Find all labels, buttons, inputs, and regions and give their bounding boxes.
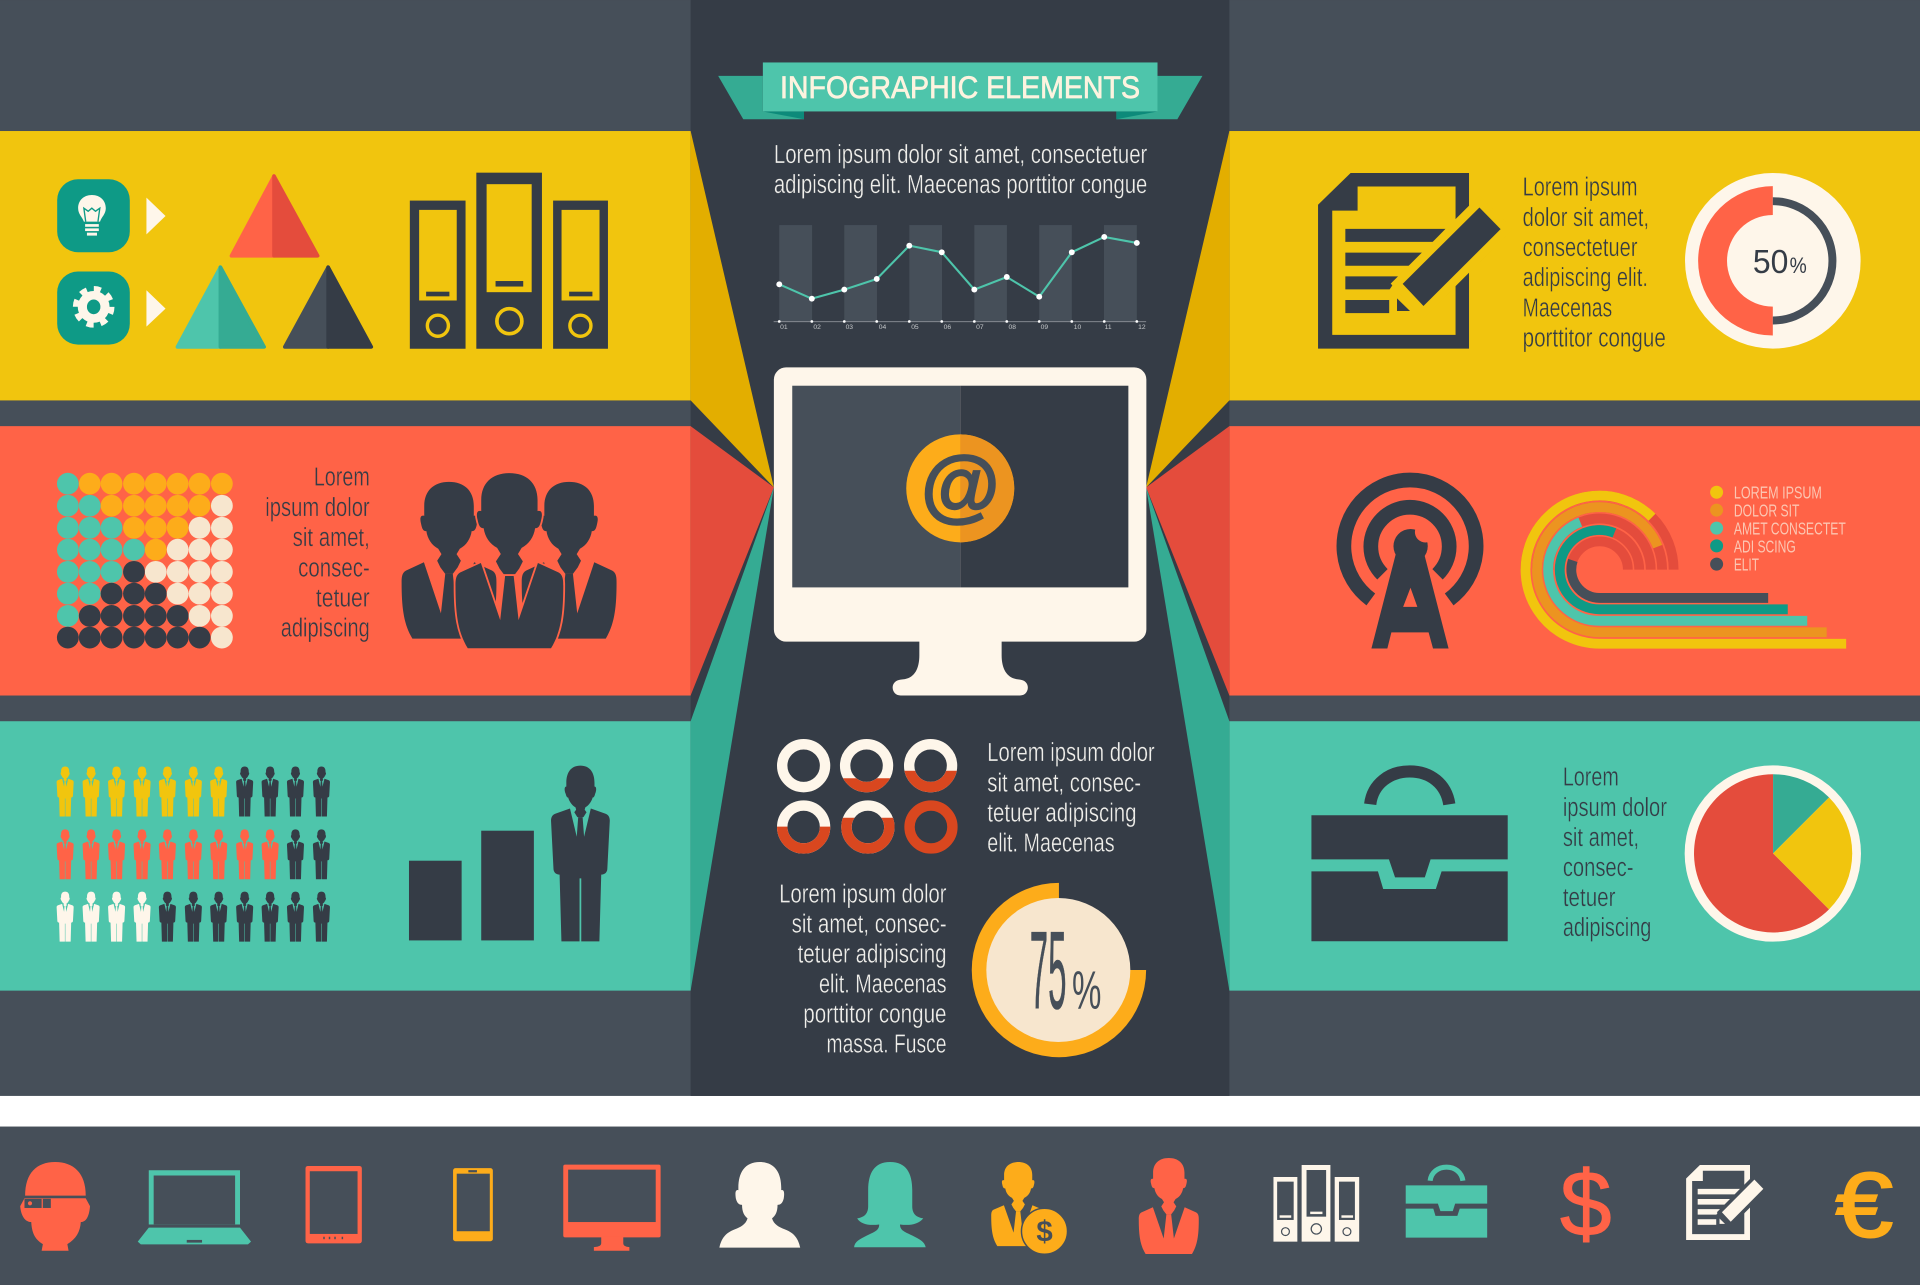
title ribbon — [718, 62, 1202, 119]
text block: orange panel: consec- — [298, 554, 370, 582]
text block: teal panel — [1563, 763, 1667, 942]
text block: teal panel: sit amet, — [1563, 824, 1639, 852]
icon: binders — [410, 173, 608, 349]
text block: yellow panel: Maecenas — [1523, 294, 1612, 322]
icon: businessman — [1139, 1158, 1199, 1254]
legend: LOREM IPSUM — [1734, 483, 1822, 503]
chart: 50 percent ring — [1685, 173, 1861, 349]
icon: female avatar — [854, 1162, 926, 1247]
line chart: 09 — [1041, 324, 1048, 331]
chart: spiral bars — [1525, 496, 1846, 644]
line chart: 10 — [1074, 324, 1082, 331]
text block: beside donuts: sit amet, consec- — [987, 770, 1141, 798]
icon: dollar sign: $ — [1560, 1152, 1612, 1256]
icon: man with coin: $ — [1036, 1216, 1053, 1249]
icon: central monitor — [774, 367, 1146, 696]
text block: intro — [774, 141, 1148, 199]
line chart: 03 — [846, 324, 853, 331]
line chart: 08 — [1009, 324, 1016, 331]
text block: intro: Lorem ipsum dolor sit amet, consectetuer — [774, 141, 1148, 169]
text block: teal panel: ipsum dolor — [1563, 794, 1667, 822]
text block: teal panel: Lorem — [1563, 763, 1619, 791]
line chart: 02 — [813, 324, 821, 331]
icon: phone — [453, 1168, 493, 1241]
text block: teal panel: adipiscing — [1563, 914, 1651, 942]
icon: laptop — [138, 1170, 251, 1244]
icon: small monitor — [563, 1165, 661, 1251]
line chart: 11 — [1105, 324, 1112, 331]
text block: orange panel: adipiscing — [281, 615, 370, 643]
text block: beside 75 percent: porttitor congue — [803, 1001, 947, 1029]
icon: document and pencil — [1318, 173, 1501, 349]
chart: 50 percent ring: 50 — [1753, 244, 1788, 281]
legend: ELIT — [1734, 555, 1759, 575]
icon: small briefcase — [1406, 1167, 1487, 1238]
text block: beside 75 percent: tetuer adipiscing — [798, 941, 947, 969]
line chart: 12 — [1138, 324, 1146, 331]
panel: teal band — [0, 721, 1920, 991]
panel: yellow band — [0, 131, 1920, 400]
text block: yellow panel: dolor sit amet, — [1523, 204, 1649, 232]
icon: at sign badge: @ — [921, 440, 1000, 530]
chart: 50 percent ring: % — [1790, 253, 1807, 278]
text block: orange panel: ipsum dolor — [265, 494, 370, 522]
text block: intro: adipiscing elit. Maecenas porttitor congue — [774, 171, 1147, 199]
text block: beside donuts: elit. Maecenas — [987, 830, 1115, 858]
text block: yellow panel: consectetuer — [1523, 234, 1638, 262]
text block: beside 75 percent: Lorem ipsum dolor — [779, 881, 947, 909]
line chart: 05 — [911, 324, 919, 331]
line chart: 07 — [976, 324, 984, 331]
text block: yellow panel: porttitor congue — [1523, 325, 1666, 353]
icon: tablet — [306, 1166, 362, 1243]
text block: beside donuts: Lorem ipsum dolor — [987, 739, 1155, 767]
bar chart with person — [409, 766, 610, 941]
text block: beside 75 percent: massa. Fusce — [827, 1031, 947, 1059]
icon: small document — [1686, 1165, 1763, 1240]
text block: teal panel: consec- — [1563, 854, 1633, 882]
panel: orange band — [0, 426, 1920, 696]
white separator band — [0, 1096, 1920, 1127]
icon: three business people — [402, 473, 617, 648]
icon: gear tile — [57, 271, 130, 345]
legend: ADI SCING — [1734, 536, 1796, 556]
icon: male avatar — [719, 1162, 800, 1248]
chart: progress donuts — [782, 744, 952, 848]
pictogram: people grid — [57, 767, 330, 942]
text block: beside donuts — [987, 739, 1155, 858]
text block: orange panel — [265, 463, 370, 643]
wedges: right fold — [1146, 131, 1229, 991]
triangle: slate — [285, 267, 371, 347]
icon: at sign badge — [906, 434, 1014, 542]
triangle: teal — [177, 267, 264, 347]
legend — [1710, 483, 1846, 575]
line chart: 06 — [944, 324, 951, 331]
arrow: lower — [146, 290, 166, 327]
icon: antenna tower — [1344, 480, 1476, 648]
legend: DOLOR SIT — [1734, 501, 1799, 521]
panel: central dark column — [691, 0, 1229, 1096]
chart: dot matrix — [57, 473, 233, 648]
text block: yellow panel: adipiscing elit. — [1523, 264, 1648, 292]
triangle: red — [231, 176, 318, 256]
title ribbon: INFOGRAPHIC ELEMENTS — [780, 70, 1140, 105]
wedges: left fold — [691, 131, 774, 991]
text block: beside donuts: tetuer adipiscing — [987, 800, 1137, 828]
icon: briefcase — [1311, 771, 1508, 941]
text block: orange panel: Lorem — [314, 463, 370, 491]
text block: beside 75 percent: elit. Maecenas — [819, 971, 947, 999]
line chart: 01 — [780, 324, 788, 331]
text block: yellow panel: Lorem ipsum — [1523, 173, 1638, 201]
icon: euro sign: € — [1836, 1155, 1893, 1257]
chart: 75 percent gauge — [972, 883, 1146, 1057]
chart: 75 percent gauge: % — [1072, 961, 1101, 1021]
icon: head with smart glasses — [20, 1162, 90, 1251]
text block: teal panel: tetuer — [1563, 884, 1616, 912]
chart: 75 percent gauge: 75 — [1030, 910, 1067, 1033]
arrow: upper — [146, 198, 166, 234]
text block: yellow panel — [1523, 173, 1666, 353]
line chart: 04 — [879, 324, 886, 331]
legend: AMET CONSECTET — [1734, 519, 1846, 539]
icon: small binders — [1273, 1165, 1359, 1242]
text block: orange panel: tetuer — [316, 585, 370, 613]
icon: man with coin — [991, 1162, 1068, 1254]
text block: beside 75 percent — [779, 881, 947, 1059]
text block: beside 75 percent: sit amet, consec- — [792, 911, 947, 939]
chart: pie — [1685, 765, 1861, 942]
icon: lightbulb tile — [57, 179, 130, 252]
line chart — [774, 225, 1146, 331]
text block: orange panel: sit amet, — [293, 524, 370, 552]
